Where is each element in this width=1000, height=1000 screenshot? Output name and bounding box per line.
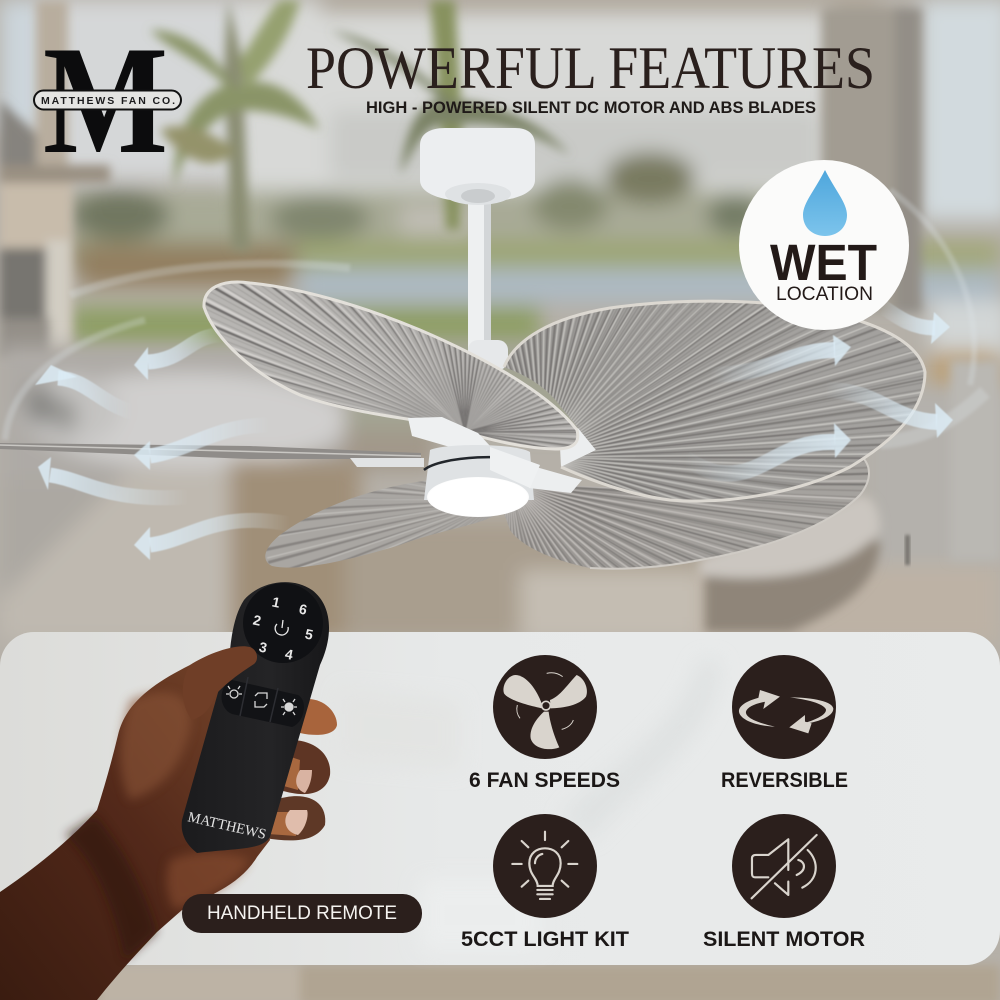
arrow: left middle [134,425,270,470]
subtitle: HIGH - POWERED SILENT DC MOTOR AND ABS BLADES [366,99,816,117]
remote dial [243,583,323,663]
wet location badge [739,160,909,330]
remote numbers: 4 [284,645,295,663]
handheld remote label: HANDHELD REMOTE [207,902,397,924]
logo: M [43,14,168,186]
logo: MATTHEWS FAN CO. [41,95,175,107]
downrod and canopy [420,128,535,370]
label: SILENT MOTOR [703,928,865,951]
arrow: upper left [134,335,222,380]
fan blade: lower right [504,459,870,570]
remote numbers: 1 [271,593,282,611]
arrow: left lower [134,520,290,560]
thumb [183,646,257,720]
icon: fan [503,673,587,749]
remote numbers: 5 [304,625,315,643]
icon: rotation arrows [739,690,833,733]
icon: muted speaker [752,835,817,898]
remote button separators [240,677,278,722]
remote numbers [252,593,315,663]
remote body [182,582,329,853]
airflow arrows [35,305,953,560]
feature: 6 fan speeds [469,655,620,792]
palm highlight [121,692,191,800]
icon: water drop [803,170,847,236]
wrist shadow [65,815,157,960]
fan blade: upper left [202,280,580,450]
arrow: right middle [825,390,953,438]
remote brand: MATTHEWS [186,809,268,843]
feature: 5cct light kit [461,814,629,951]
icon: light bulb [512,832,577,899]
label: REVERSIBLE [721,769,848,792]
palm and arm [0,650,270,1000]
feature: reversible [721,655,848,792]
arrow: right upper [710,335,851,375]
remote numbers: 6 [298,600,309,618]
fan arm: right triangle [560,428,596,467]
remote numbers: 2 [252,611,263,629]
label: 6 FAN SPEEDS [469,769,620,792]
remote button row [222,680,304,727]
feature: silent motor [703,814,865,951]
panel texture [340,660,720,950]
button icons [226,686,297,715]
arrow: far left upper [35,365,132,412]
arrow: right top [880,305,950,344]
remote numbers: 3 [258,638,269,656]
arrow: far left lower [38,457,188,498]
handheld remote label [182,894,422,933]
hand holding remote [0,582,337,1000]
fingers [265,699,337,840]
location label: LOCATION [776,284,873,305]
arrow: right lower [685,423,851,473]
label: 5CCT LIGHT KIT [461,928,629,951]
fan blade: lower left [265,480,492,568]
fan motor hub and light [350,417,582,517]
title: POWERFUL FEATURES [306,35,875,101]
fan blade: left edge-on [0,443,421,459]
fan blade: upper right [502,300,926,503]
panel: features background [0,632,1000,965]
lower palm highlight [167,852,250,910]
power icon [275,620,288,635]
faint air swirl bands [5,190,985,442]
wet label: WET [770,234,877,291]
